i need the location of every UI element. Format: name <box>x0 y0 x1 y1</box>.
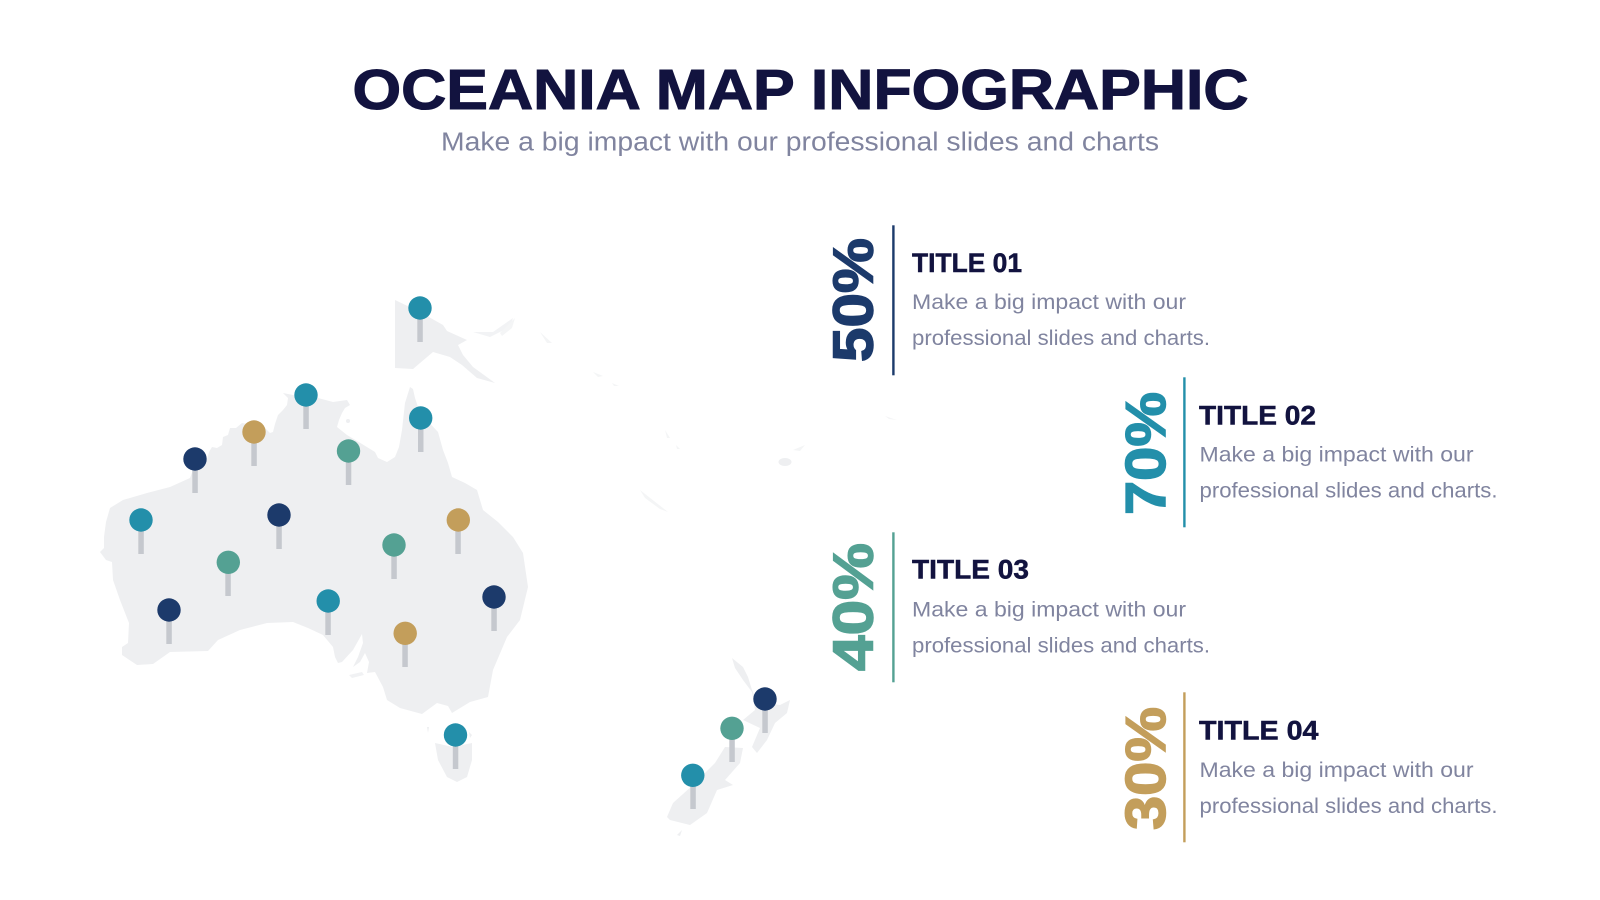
description: professional slides and charts. <box>912 634 1210 657</box>
panel: title 02 <box>1114 377 1498 527</box>
percentage 50%: 50% <box>822 238 886 362</box>
map region: Pacific islands <box>500 318 897 512</box>
pin: south-west Queensland <box>382 533 406 579</box>
map region: Tasmania <box>427 727 472 782</box>
description: professional slides and charts. <box>1200 795 1498 818</box>
map region: New Zealand South Island <box>667 747 743 836</box>
description: Make a big impact with our <box>1200 444 1474 467</box>
divider bar <box>892 532 895 682</box>
divider bar <box>1183 377 1186 527</box>
panel: title 03 <box>822 532 1210 682</box>
pin: Northern Territory north <box>294 383 318 429</box>
pin: Tasmania <box>444 723 467 769</box>
map region: New Zealand North Island <box>732 658 790 753</box>
panel: title 01 <box>822 225 1210 375</box>
divider bar <box>1183 692 1186 842</box>
description: professional slides and charts. <box>912 327 1210 350</box>
pin: central desert <box>267 503 291 549</box>
heading: TITLE 04 <box>1199 715 1318 745</box>
description: Make a big impact with our <box>1200 759 1474 782</box>
pin: New Zealand centre <box>720 717 744 762</box>
pin: Western Australia interior <box>217 551 240 596</box>
pin: Broome <box>183 447 207 493</box>
pin: South Australia <box>316 589 340 635</box>
map region: Melville Island <box>346 419 350 423</box>
divider bar <box>892 225 895 375</box>
panel: title 04 <box>1114 692 1498 842</box>
pin markers <box>129 296 777 809</box>
pin: Brisbane region <box>482 585 506 631</box>
pin: Cape York <box>409 406 432 452</box>
map: Oceania <box>100 300 897 836</box>
pin: Perth region <box>157 598 181 644</box>
heading: TITLE 03 <box>912 554 1029 584</box>
percentage 30%: 30% <box>1114 707 1178 830</box>
description: Make a big impact with our <box>912 291 1186 314</box>
pin: Papua New Guinea <box>408 296 432 342</box>
map region: Fiji <box>778 458 792 466</box>
description: Make a big impact with our <box>912 598 1186 621</box>
subtitle: Make a big impact with our professional slides and charts <box>441 128 1159 156</box>
description: professional slides and charts. <box>1200 480 1498 502</box>
pin: Gulf country <box>337 439 360 485</box>
map region: Papua New Guinea <box>395 300 495 383</box>
map region: New Britain <box>473 318 513 337</box>
map region: Kangaroo Island <box>349 672 364 678</box>
percentage 70%: 70% <box>1114 392 1178 515</box>
heading: TITLE 01 <box>912 248 1022 278</box>
pin: New Zealand north <box>753 687 777 733</box>
heading: TITLE 02 <box>1199 400 1316 430</box>
map region: Australia mainland <box>100 387 528 714</box>
pin: central Queensland <box>447 508 470 554</box>
pin: Pilbara coast <box>129 508 153 554</box>
pin: New South Wales <box>394 622 417 667</box>
title: OCEANIA MAP INFOGRAPHIC <box>352 58 1248 122</box>
pin: New Zealand south <box>681 764 704 809</box>
percentage 40%: 40% <box>822 543 886 671</box>
pin: Kimberley <box>242 420 266 466</box>
